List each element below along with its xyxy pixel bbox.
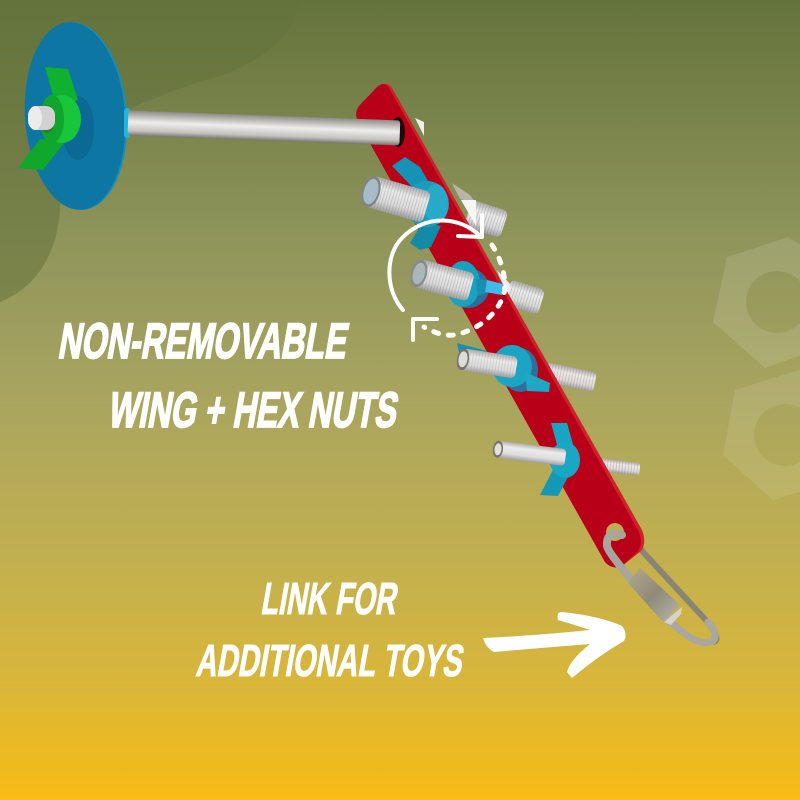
text: link for additional toys: ADDITIONAL TOYS xyxy=(193,635,468,686)
blue disc with green wing nut xyxy=(18,19,133,213)
back ends of bolts xyxy=(415,118,640,476)
text: non-removable wing + hex nuts xyxy=(55,312,403,438)
arrow: dashed counter-clockwise rotation xyxy=(413,245,505,340)
icon: background hex nut, lower xyxy=(723,369,800,500)
steel rod xyxy=(128,111,405,147)
text: non-removable wing + hex nuts: NON-REMOVABLE xyxy=(55,312,353,369)
decorative dark blob, top left xyxy=(0,0,300,302)
text: link for additional toys xyxy=(193,573,468,686)
text: link for additional toys: LINK FOR xyxy=(258,573,402,624)
carabiner back leg xyxy=(623,535,716,642)
wing nut and bolt 2 xyxy=(407,257,503,308)
carabiner link xyxy=(607,534,715,643)
arrow: solid clockwise rotation xyxy=(389,215,482,310)
text: non-removable wing + hex nuts: WING + HEX NUTS xyxy=(105,381,403,438)
wing nut and bolt 1 xyxy=(358,157,449,250)
icon: background hex nut, upper xyxy=(713,237,800,368)
red bar xyxy=(356,84,644,567)
toy product illustration xyxy=(18,19,716,643)
wing nut and bolt 3 xyxy=(455,343,550,392)
arrow: hand-drawn pointing to link xyxy=(483,612,626,678)
wing nut and bolt 4 xyxy=(492,423,580,496)
